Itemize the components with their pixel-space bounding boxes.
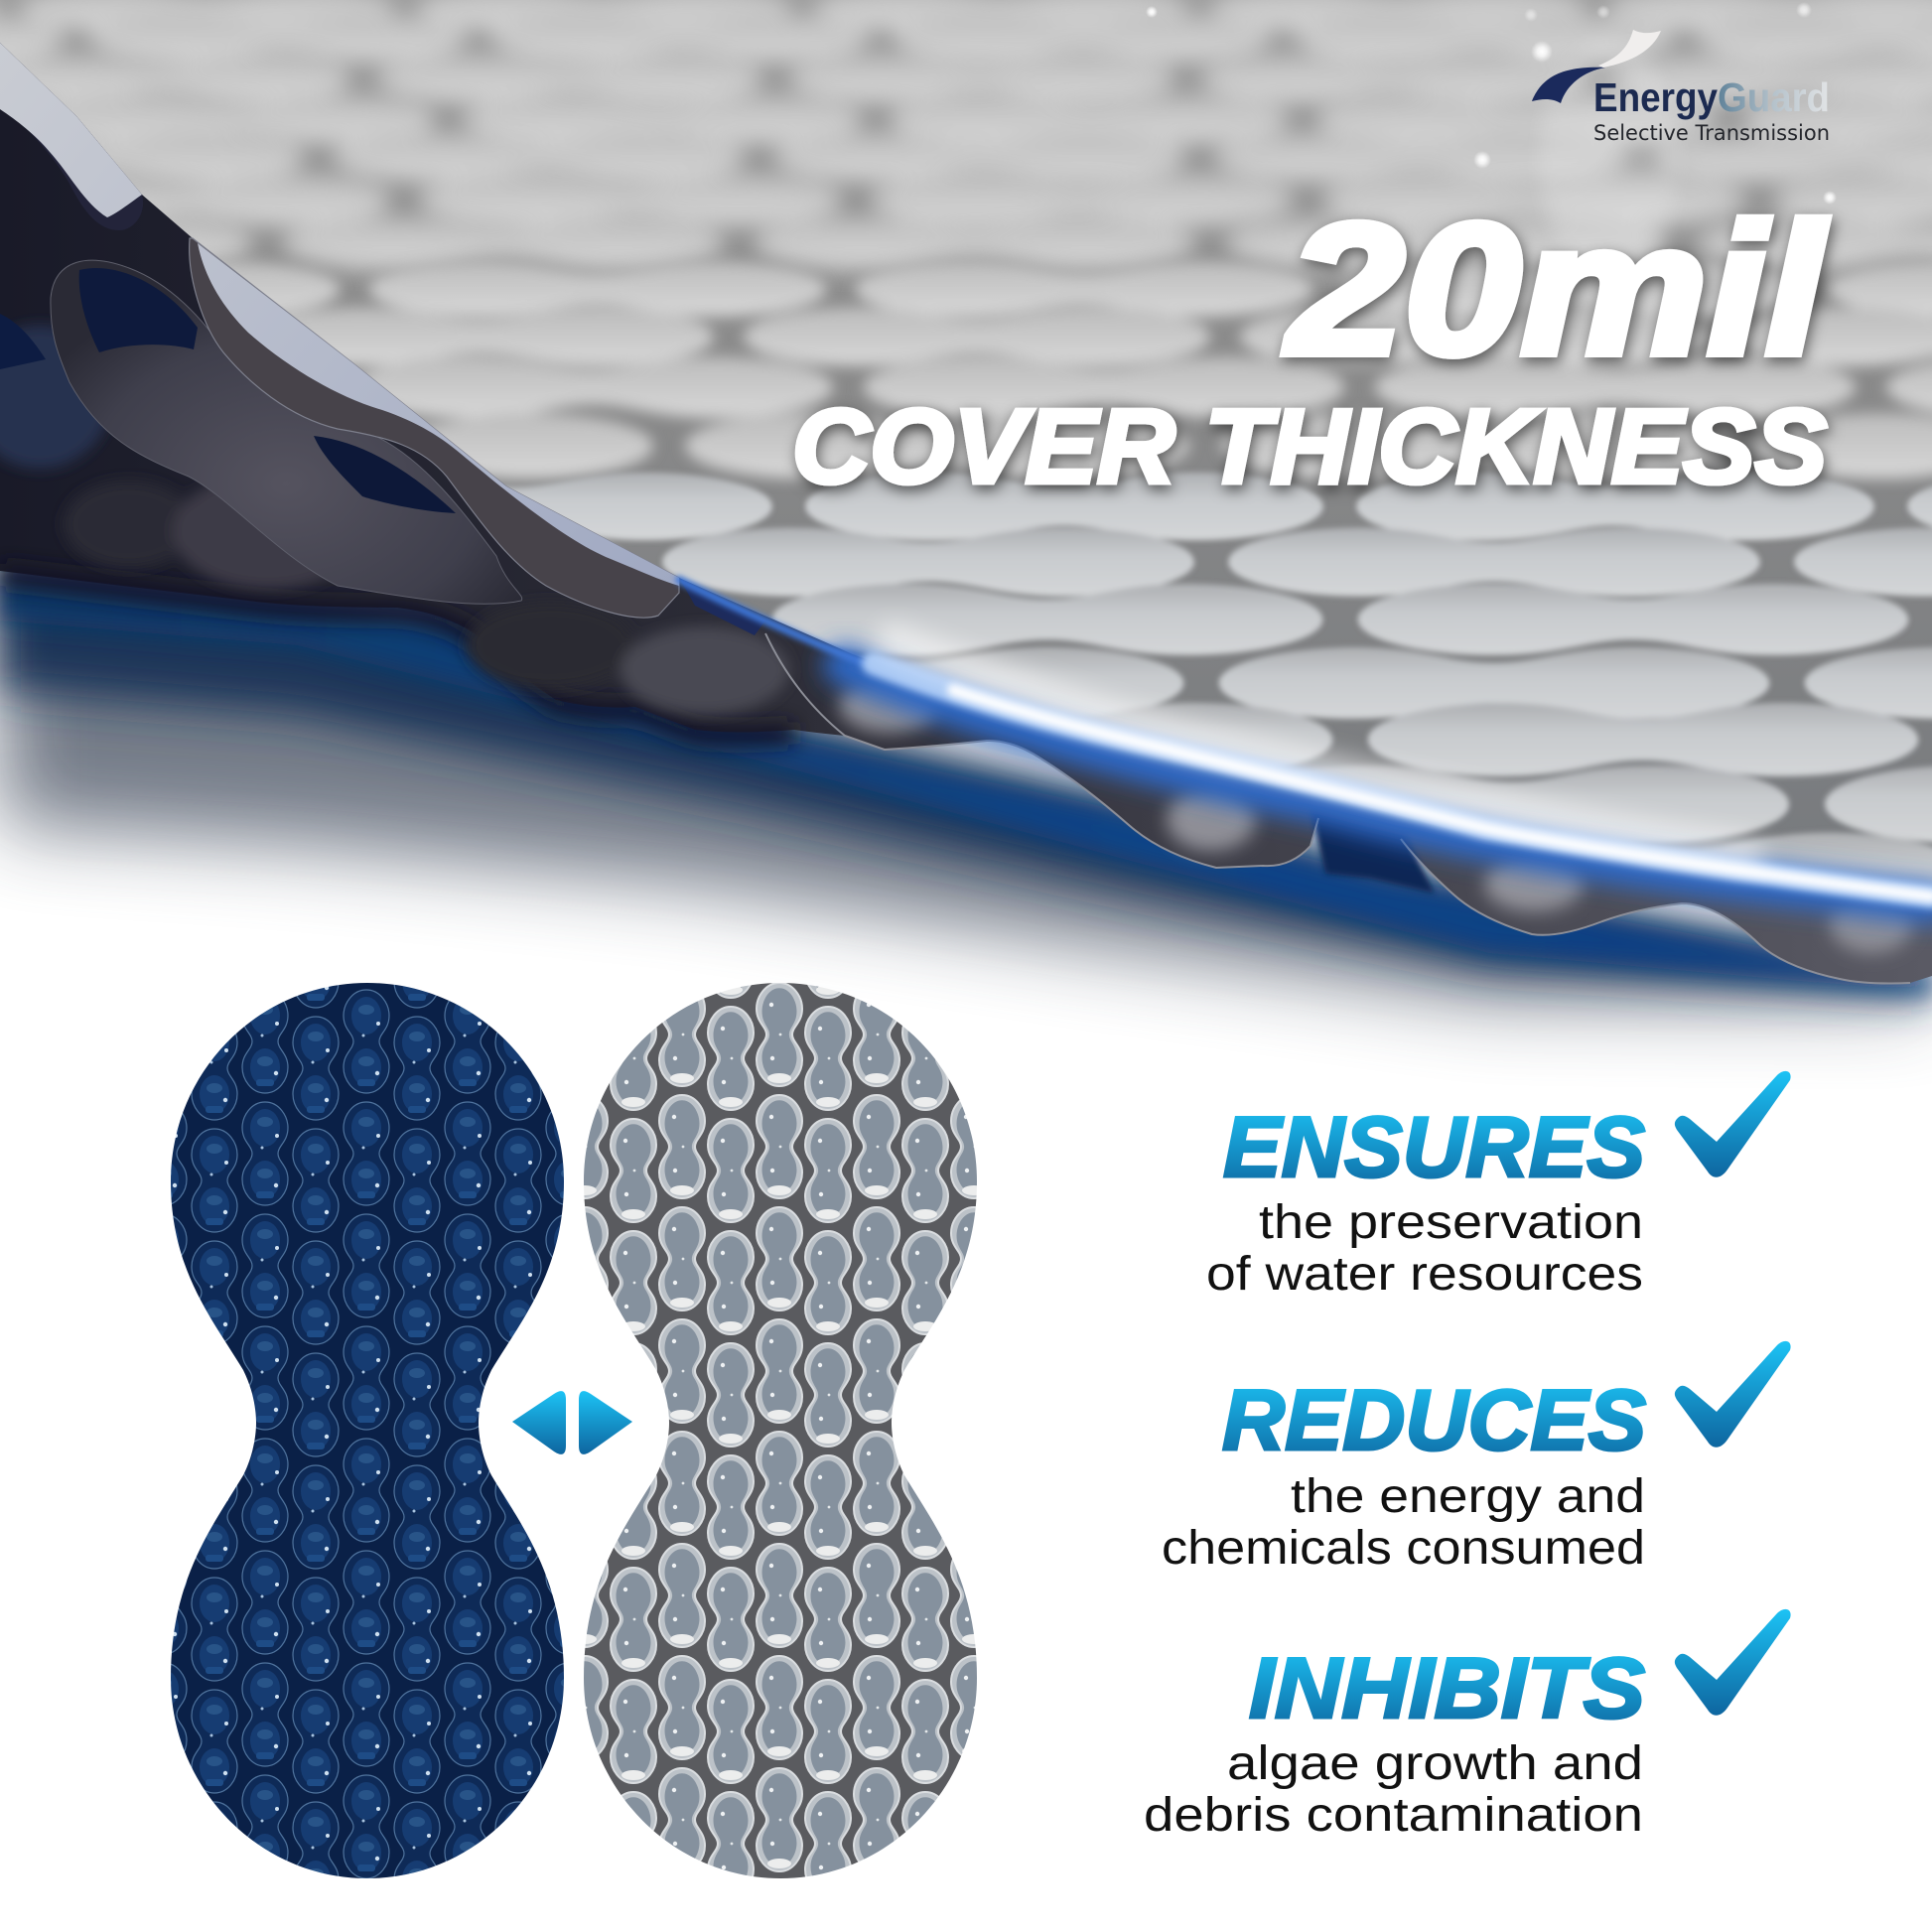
lip and light band along cover edge, left side bbox=[0, 43, 765, 635]
icon: check mark bbox=[1675, 1609, 1791, 1716]
soft bottom edge of out-of-focus bubbles bbox=[0, 574, 794, 735]
white area below the cover edge bbox=[0, 43, 1932, 1092]
panel: blue side cover sample bbox=[171, 983, 564, 1878]
benefit: ensures bbox=[1206, 1071, 1791, 1301]
upper large bubble bbox=[51, 260, 522, 604]
text line 2: debris contamination bbox=[1144, 1789, 1643, 1842]
cover underside with scalloped bubbles bbox=[0, 43, 1932, 983]
text line 2: of water resources bbox=[1206, 1248, 1643, 1301]
light streak along cover edge bbox=[679, 580, 1932, 903]
title: 20mil: 20mil bbox=[1285, 185, 1828, 393]
dark gap between scallops bbox=[1311, 809, 1435, 894]
text line 2: chemicals consumed bbox=[1162, 1522, 1645, 1575]
text line 1: algae growth and bbox=[1227, 1737, 1643, 1790]
scallop rims bbox=[765, 633, 1910, 983]
logo tagline: Selective Transmission bbox=[1593, 121, 1830, 145]
logo word Guard: Guard bbox=[1718, 74, 1830, 120]
icon: check mark bbox=[1675, 1071, 1791, 1177]
title: COVER THICKNESS: COVER THICKNESS bbox=[792, 388, 1827, 505]
heading: REDUCES bbox=[1222, 1373, 1646, 1468]
highlights on right scallops bbox=[839, 677, 1913, 953]
heading: ENSURES bbox=[1223, 1100, 1645, 1195]
text line 1: the preservation bbox=[1259, 1196, 1643, 1249]
icon: navy wing bbox=[1532, 68, 1605, 103]
icon: double arrows between samples bbox=[512, 1391, 632, 1454]
icon: white wing bbox=[1598, 30, 1661, 68]
icon: check mark bbox=[1675, 1341, 1791, 1448]
heading: INHIBITS bbox=[1249, 1641, 1645, 1736]
logo: EnergyGuard Selective Transmission bbox=[1532, 30, 1830, 145]
logo word Energy: Energy bbox=[1593, 74, 1718, 120]
text line 1: the energy and bbox=[1291, 1470, 1645, 1523]
sparkles bbox=[1146, 2, 1837, 205]
panel: silver side cover sample bbox=[584, 983, 977, 1878]
photo: blurred cover surface with peanut bubbles bbox=[0, 0, 1932, 933]
benefit: reduces bbox=[1162, 1341, 1791, 1575]
navy reflections bbox=[79, 268, 198, 352]
shadow under the cover bbox=[0, 566, 1932, 1003]
lower row bubbles bbox=[0, 326, 789, 714]
benefit: inhibits bbox=[1144, 1609, 1791, 1842]
